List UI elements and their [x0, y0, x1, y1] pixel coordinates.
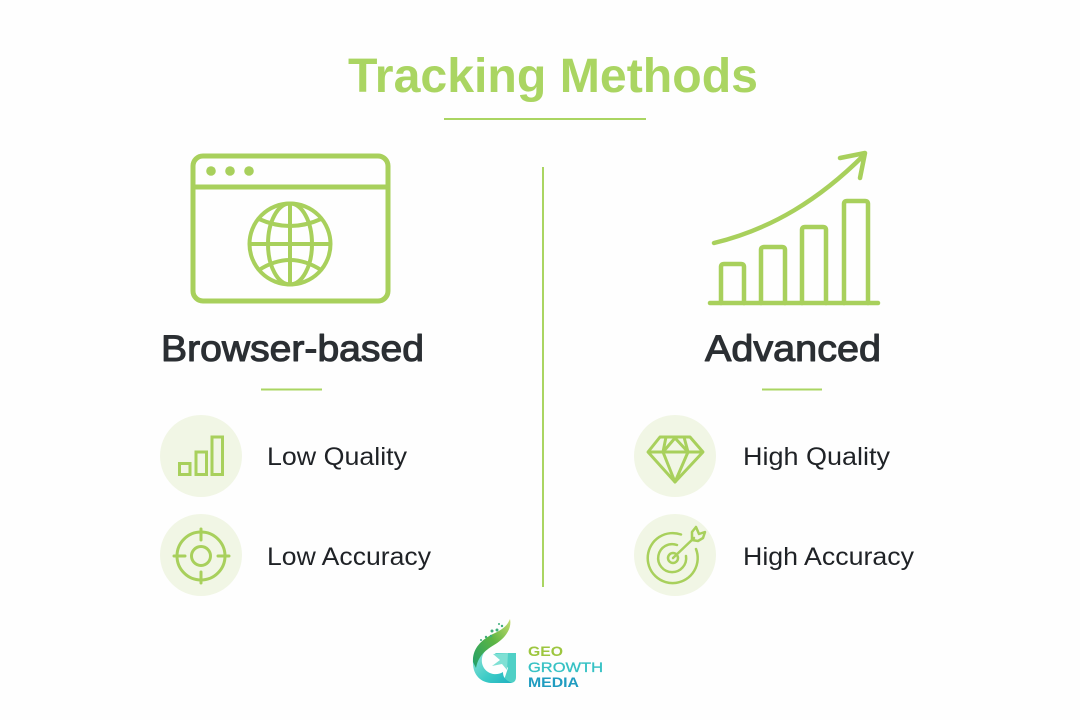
- item: high accuracy: High Accuracy: [743, 543, 915, 571]
- icon: rising bar chart with arrow: [710, 153, 878, 303]
- logo mark: [473, 619, 516, 683]
- logo: Geo Growth Media: [473, 619, 603, 690]
- item: high quality: [634, 415, 891, 497]
- heading: browser-based: Browser-based: [161, 328, 424, 369]
- icon: browser window with globe: [193, 156, 388, 301]
- logo wordmark: MEDIA: [528, 674, 579, 690]
- logo wordmark: GROWTH: [528, 659, 603, 675]
- item: high quality: High Quality: [743, 443, 891, 471]
- logo wordmark: GEO: [528, 643, 563, 659]
- heading: advanced: Advanced: [705, 328, 881, 369]
- logo wordmark: [528, 643, 603, 690]
- title: Tracking Methods: [348, 50, 758, 103]
- item: low accuracy: Low Accuracy: [267, 543, 432, 571]
- item: low quality: Low Quality: [267, 443, 408, 471]
- panel: advanced: [634, 153, 915, 596]
- item: low accuracy: [160, 514, 432, 596]
- panel: browser-based: [160, 156, 432, 596]
- item: low quality: [160, 415, 408, 497]
- item: high accuracy: [634, 514, 915, 596]
